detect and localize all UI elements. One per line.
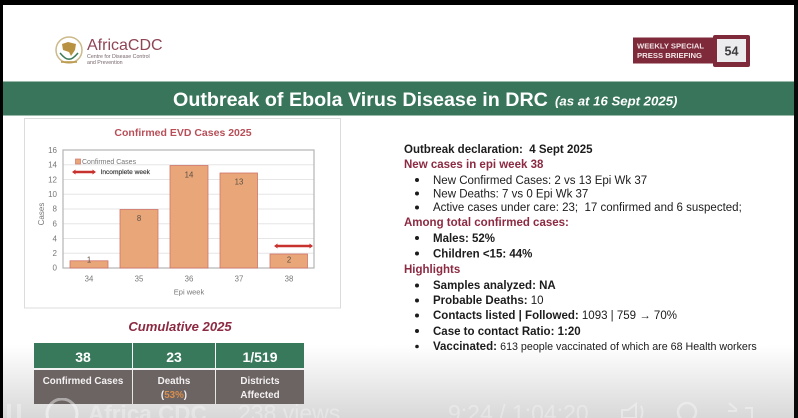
logo wordmark: AfricaCDC	[87, 37, 163, 54]
top black band	[0, 0, 798, 5]
logo tagline: Centre for Disease Control	[87, 54, 150, 60]
legend: Confirmed Cases	[82, 159, 137, 166]
panel: bar chart of confirmed EVD cases	[24, 118, 340, 308]
title banner: (as at 16 Sept 2025)	[555, 94, 677, 108]
x axis labels	[85, 274, 293, 284]
title banner	[3, 82, 794, 116]
badge: weekly special press briefing: PRESS BRIEFING	[637, 53, 703, 60]
deaths column: 23	[166, 349, 182, 365]
plot frame and grid lines	[63, 165, 314, 253]
section: new cases: New cases in epi week 38	[404, 159, 544, 171]
icon: pause	[7, 404, 21, 418]
y axis title: Cases	[37, 203, 46, 225]
section: new cases	[404, 159, 742, 214]
deaths column	[133, 343, 215, 404]
districts affected column: Affected	[240, 390, 280, 401]
arrow: incomplete week marker	[274, 244, 313, 248]
y axis labels: 16	[48, 146, 58, 155]
text block: outbreak summary	[404, 144, 757, 353]
chart title: Confirmed EVD Cases 2025	[114, 127, 252, 139]
bar value labels: 8	[137, 214, 141, 223]
video player caption	[7, 399, 752, 418]
logo: Africa CDC	[56, 37, 163, 66]
heading: cumulative 2025: Cumulative 2025	[128, 319, 232, 334]
right black edge	[794, 0, 798, 418]
x axis labels: 36	[185, 274, 193, 284]
table: cumulative figures	[34, 343, 304, 404]
section: new cases: Active cases under care: 23; 17 confirmed and 6 suspected;	[433, 202, 742, 214]
section: highlights: Contacts listed | Followed: 1093 | 759 → 70%	[433, 310, 677, 322]
confirmed cases column: 38	[75, 349, 91, 365]
section: highlights: Probable Deaths: 10	[433, 295, 544, 307]
section: highlights	[404, 264, 757, 353]
icon: picture in picture	[728, 403, 752, 418]
x axis labels: 35	[135, 274, 144, 284]
outbreak declaration: Outbreak declaration: 4 Sept 2025	[404, 144, 593, 156]
video player gradient overlay	[3, 345, 794, 418]
section: highlights: Samples analyzed: NA	[433, 280, 556, 292]
bars	[70, 166, 308, 268]
section: highlights: Highlights	[404, 264, 460, 276]
deaths column: (53%)	[161, 390, 187, 401]
icon: settings	[678, 403, 696, 418]
icon: channel avatar	[47, 399, 77, 418]
x axis title: Epi week	[174, 288, 204, 296]
y axis labels	[48, 146, 58, 272]
legend: Incomplete week	[100, 169, 151, 176]
y axis labels: 2	[53, 249, 58, 258]
logo: Africa CDC: and Prevention	[87, 60, 123, 66]
section: among total confirmed cases: Children <15: 44%	[433, 248, 532, 260]
section: among total confirmed cases	[404, 217, 569, 260]
section: highlights: Case to contact Ratio: 1:20	[433, 326, 581, 338]
y axis labels: 14	[48, 160, 58, 170]
y axis labels: 6	[53, 220, 58, 228]
bar value labels	[87, 170, 291, 264]
y axis labels: 8	[53, 204, 58, 214]
section: highlights: Vaccinated: 613 people vaccinated of which are 68 Health workers	[433, 341, 757, 353]
section: new cases: New Deaths: 7 vs 0 Epi Wk 37	[433, 188, 588, 200]
districts affected column: Districts	[240, 376, 280, 387]
legend	[72, 159, 151, 176]
bar value labels: 2	[287, 256, 291, 264]
x axis labels: 37	[235, 274, 243, 284]
section: among total confirmed cases: Among total confirmed cases:	[404, 217, 569, 229]
icon: Africa emblem	[56, 37, 82, 63]
confirmed cases column	[34, 343, 132, 404]
bar value labels: 13	[235, 178, 243, 186]
bar value labels: 14	[185, 170, 194, 180]
badge: weekly special press briefing: WEEKLY SPECIAL	[637, 44, 705, 50]
badge: weekly special press briefing	[633, 35, 750, 67]
section: among total confirmed cases: Males: 52%	[433, 233, 495, 245]
y axis labels: 12	[48, 176, 58, 184]
section: new cases: New Confirmed Cases: 2 vs 13 Epi Wk 37	[433, 175, 647, 187]
x axis labels: 34	[85, 274, 94, 284]
districts affected column: 1/519	[242, 349, 278, 365]
y axis labels: 4	[53, 234, 58, 244]
districts affected column	[216, 343, 304, 404]
y axis labels: 0	[53, 264, 58, 272]
badge: weekly special press briefing: 54	[725, 44, 738, 58]
deaths column: Deaths	[158, 376, 191, 387]
x axis labels: 38	[285, 274, 293, 284]
y axis labels: 10	[48, 190, 58, 199]
title banner: Outbreak of Ebola Virus Disease in DRC	[173, 89, 548, 111]
icon: volume	[622, 404, 642, 418]
bar value labels: 1	[87, 256, 91, 264]
confirmed cases column: Confirmed Cases	[43, 376, 124, 387]
